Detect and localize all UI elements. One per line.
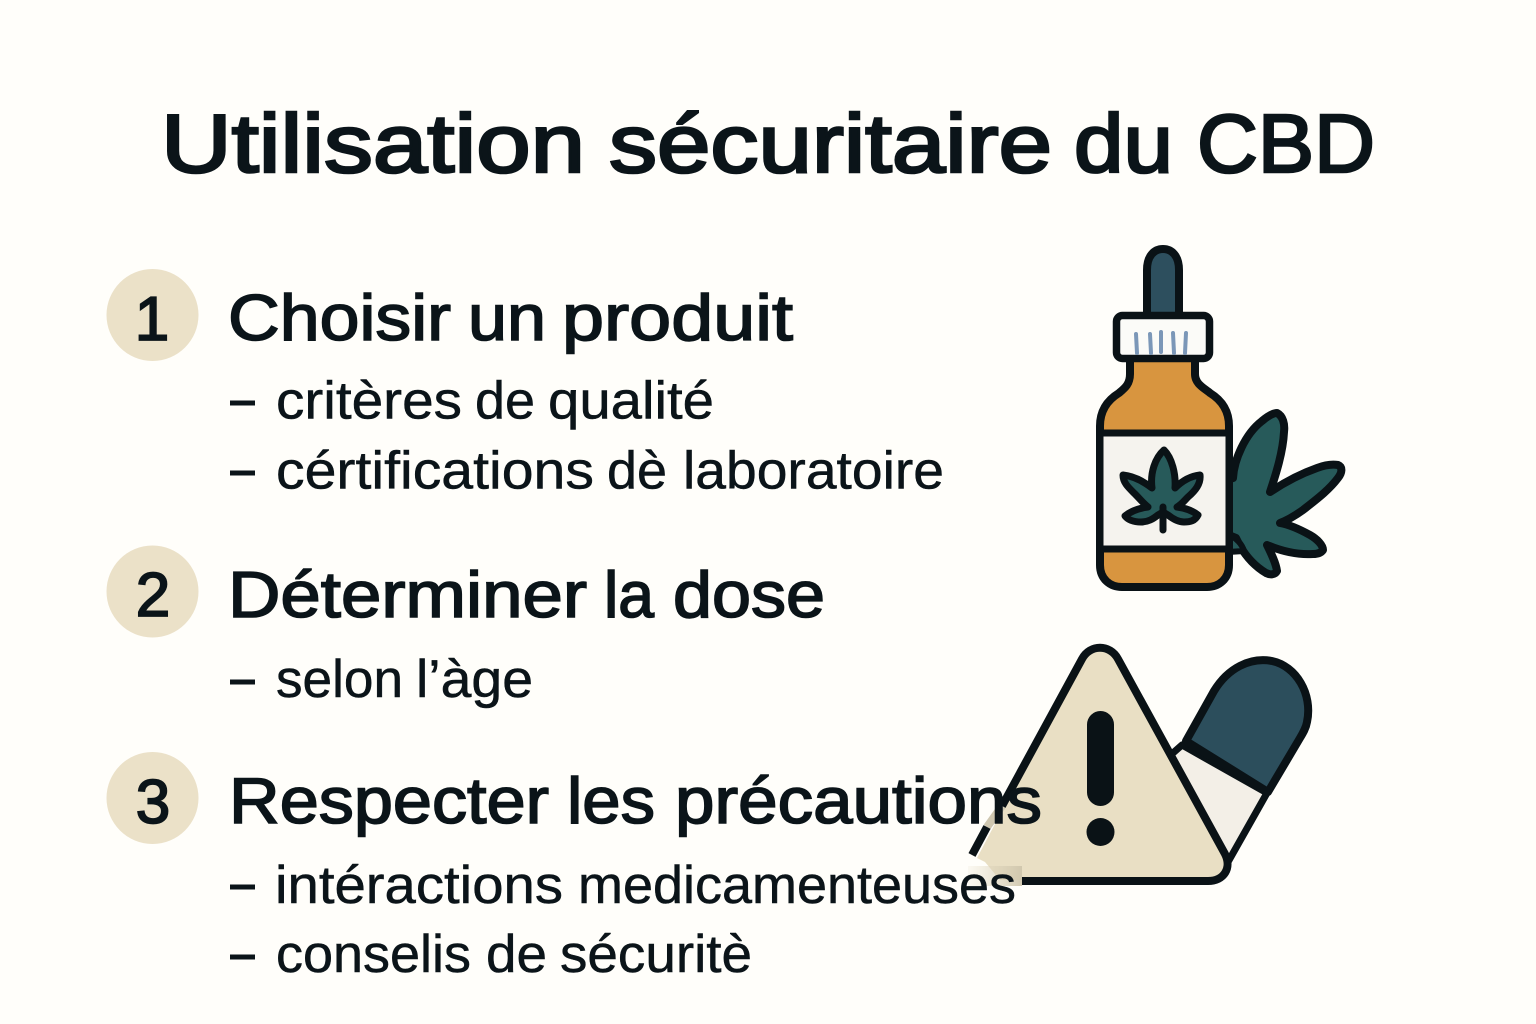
title: Utilisation [161, 97, 585, 190]
capsule navy half [1186, 660, 1308, 792]
bullet: certifications [230, 442, 944, 500]
bullet: critères de qualité: de [475, 372, 535, 430]
bullet: interactions: intéractions [275, 856, 563, 915]
title: sécuritaire [609, 97, 1052, 190]
bullet: conseils: de [486, 925, 547, 984]
icon: bottle cap [1116, 316, 1210, 358]
title: CBD [1197, 97, 1375, 190]
bullet: selon l'âge [230, 650, 533, 709]
leaf lower lobe [1228, 534, 1244, 552]
icon: dropper bulb [1147, 249, 1179, 316]
number badge 1: 1 [135, 285, 169, 354]
icon: dropper bottle with leaf [1100, 249, 1341, 587]
bullet: critères de qualité: qualité [548, 372, 714, 430]
number badge 3 [106, 752, 198, 844]
triangle fill [977, 648, 1228, 880]
heading: choisir un produit: produit [562, 281, 793, 354]
title [161, 97, 1375, 190]
number badge 2 [106, 546, 198, 638]
heading: choisir un produit [228, 281, 793, 354]
icon: bottle body [1100, 358, 1229, 587]
bullet: critères de qualité [230, 372, 714, 430]
icon: large cannabis leaf [1226, 413, 1341, 574]
heading: respecter les précautions: précautions [675, 764, 1042, 837]
heading: respecter les précautions: les [567, 764, 655, 837]
heading: déterminer la dose: Déterminer [228, 558, 587, 631]
icon: cap ridges [1136, 332, 1186, 353]
title: du [1074, 97, 1173, 190]
faded bottom-left patch [968, 866, 1022, 886]
bullet: conseils [230, 925, 752, 984]
heading: choisir un produit: un [468, 281, 546, 354]
exclamation dot [1086, 818, 1114, 846]
exclamation bar [1087, 711, 1114, 806]
bullet: certifications: dè [607, 442, 667, 500]
heading: déterminer la dose: dose [673, 558, 825, 631]
number badge 1 [106, 269, 198, 361]
heading: déterminer la dose: la [604, 558, 655, 631]
bullet: critères de qualité: critères [276, 372, 462, 430]
icon: capsule [1165, 660, 1308, 880]
heading: déterminer la dose [228, 558, 825, 631]
capsule cream half [1165, 745, 1267, 880]
bullet: interactions: medicamenteuses [578, 856, 1016, 915]
heading: choisir un produit: Choisir [228, 281, 451, 354]
heading: respecter les précautions [229, 764, 1042, 837]
bullet: selon l'âge: selon [276, 650, 403, 709]
bullet: conseils: conselis [276, 925, 471, 984]
icon: small leaf on label [1123, 450, 1200, 522]
faded segment of outline [987, 806, 1002, 827]
step 1 [106, 269, 944, 500]
bullet: selon l'âge: l’àge [416, 650, 533, 709]
bullet: conseils: sécuritè [560, 925, 752, 984]
icon: warning triangle [968, 648, 1228, 886]
bullet: certifications: cértifications [276, 442, 594, 500]
icon: bottle label [1100, 433, 1229, 549]
number badge 3: 3 [136, 768, 170, 837]
bullet: certifications: laboratoire [683, 442, 944, 500]
triangle outline [972, 648, 1228, 881]
step 2 [106, 546, 825, 709]
bullet: interactions [230, 856, 1016, 915]
number badge 2: 2 [136, 561, 170, 630]
step 3 [106, 752, 1042, 984]
icon: leaf stem [1160, 507, 1166, 530]
heading: respecter les précautions: Respecter [229, 764, 549, 837]
